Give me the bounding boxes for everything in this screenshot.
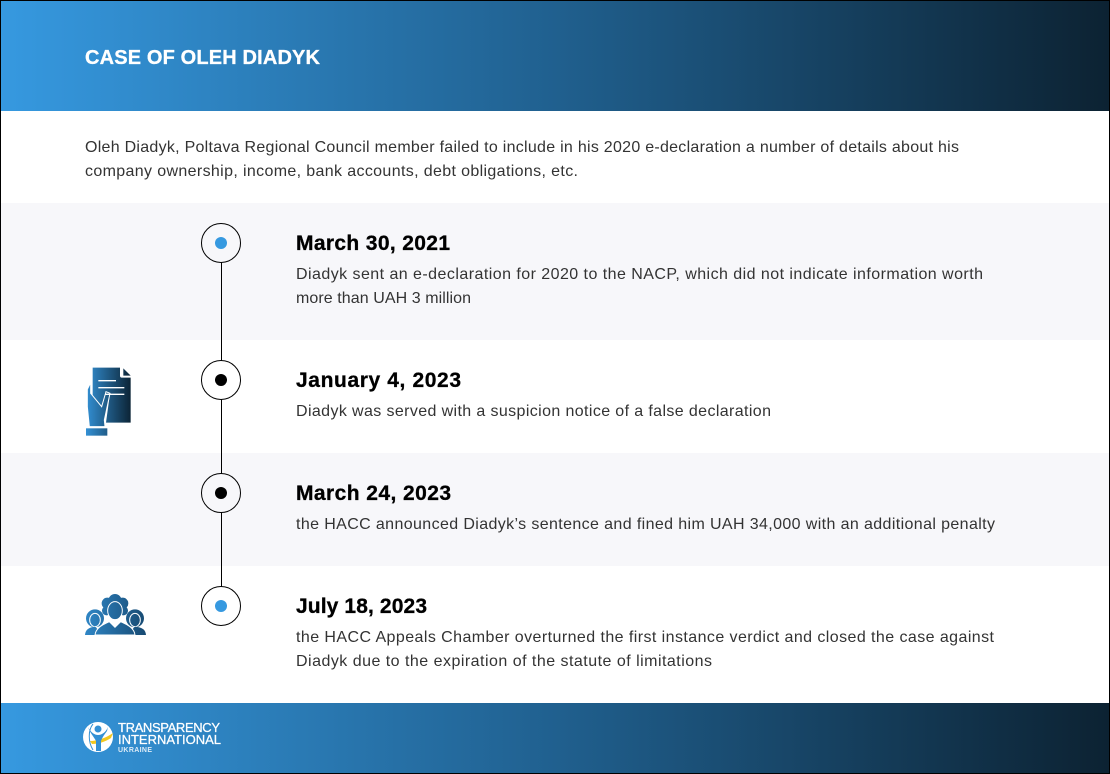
header band — [0, 0, 1110, 111]
event: July 18, 2023: Diadyk due to the expiration of the statute of limitations — [296, 653, 712, 670]
event: March 30, 2021 — [296, 232, 983, 307]
timeline marker 2 — [202, 360, 240, 400]
timeline marker 4 — [202, 586, 240, 626]
event: January 4, 2023: January 4, 2023 — [296, 369, 461, 392]
event: January 4, 2023 — [296, 369, 771, 420]
event: July 18, 2023 — [296, 595, 995, 670]
event: March 30, 2021: March 30, 2021 — [296, 232, 450, 255]
event: March 24, 2023: March 24, 2023 — [296, 482, 451, 505]
event: July 18, 2023: July 18, 2023 — [296, 595, 427, 618]
logo: Transparency International Ukraine: INTERNATIONAL — [118, 732, 221, 747]
icon: group of people — [85, 594, 146, 635]
event: March 24, 2023 — [296, 482, 995, 533]
event: March 30, 2021: Diadyk sent an e-declaration for 2020 to the NACP, which did not indicate information worth — [296, 266, 983, 283]
logo: Transparency International Ukraine — [83, 720, 221, 754]
footer band — [0, 703, 1110, 774]
event: March 30, 2021: more than UAH 3 million — [296, 290, 471, 307]
title: CASE OF OLEH DIADYK — [85, 47, 321, 69]
logo: Transparency International Ukraine: TRANSPARENCY — [118, 720, 220, 735]
icon: hand holding document — [86, 368, 131, 436]
timeline marker 3 — [202, 474, 240, 512]
logo: Transparency International Ukraine: UKRAINE — [118, 747, 152, 754]
row background: March 30, 2021 — [0, 203, 1110, 340]
event: March 24, 2023: the HACC announced Diadyk’s sentence and fined him UAH 34,000 with an additional penalty — [296, 516, 995, 533]
timeline marker 1 — [202, 224, 240, 262]
event: July 18, 2023: the HACC Appeals Chamber overturned the first instance verdict and closed the case against — [296, 629, 995, 646]
intro text — [85, 139, 959, 180]
event: January 4, 2023: Diadyk was served with a suspicion notice of a false declaration — [296, 403, 771, 420]
intro text: Oleh Diadyk, Poltava Regional Council member failed to include in his 2020 e-declaration a number of details about his — [85, 139, 959, 156]
timeline line — [221, 243, 222, 606]
intro text: company ownership, income, bank accounts, debt obligations, etc. — [85, 163, 578, 180]
row background: March 24, 2023 — [0, 453, 1110, 566]
